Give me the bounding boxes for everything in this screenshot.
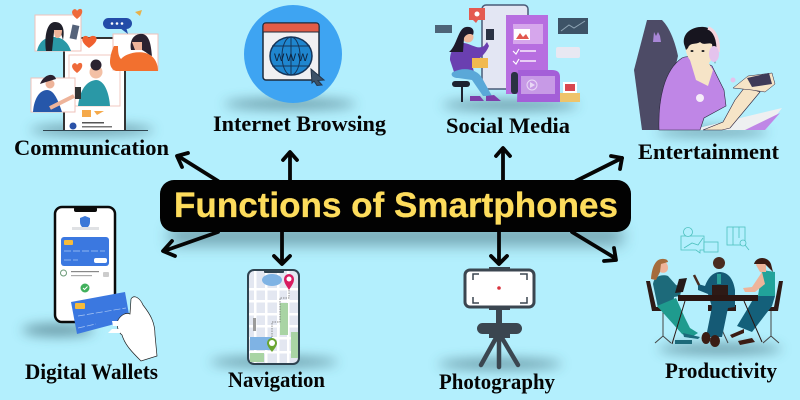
arrow: to digital wallets <box>163 232 218 256</box>
panel: entertainment <box>634 20 782 164</box>
label: photography: Photography <box>439 369 555 394</box>
panel: navigation <box>228 270 325 392</box>
icon: woman lower left <box>31 75 81 112</box>
panel: digital wallets <box>25 207 158 384</box>
arrow: to internet browsing <box>283 152 297 181</box>
icon: phone with bank card <box>55 207 157 361</box>
icon: woman with social screens <box>435 5 588 102</box>
icon: video call phone <box>43 38 148 130</box>
label: social media: Social Media <box>446 113 570 138</box>
panel: internet browsing <box>213 5 386 136</box>
label: digital wallets: Digital Wallets <box>25 359 158 384</box>
arrow: to navigation <box>274 232 290 264</box>
icon: woman top right <box>110 34 158 71</box>
arrow: to communication <box>177 153 218 181</box>
title banner: Functions of Smartphones <box>174 186 618 225</box>
icon: hearts and speech bubble <box>72 9 142 73</box>
icon: woman top left <box>35 15 81 51</box>
icon: phone on tripod <box>465 267 534 367</box>
arrow: to photography <box>491 232 507 264</box>
label: entertainment: Entertainment <box>638 139 780 164</box>
label: communication: Communication <box>14 135 169 160</box>
icon: gamer with headphones <box>634 20 782 130</box>
ground shadows <box>22 99 782 369</box>
panel: photography <box>439 267 555 394</box>
panel: productivity <box>646 227 783 383</box>
arrow: to social media <box>496 148 510 181</box>
label: productivity: Productivity <box>665 358 777 383</box>
panel: social media <box>435 5 588 138</box>
arrow: to productivity <box>572 232 616 261</box>
icon: browser globe: WWW <box>274 52 309 64</box>
icon: meeting around a table <box>646 227 783 347</box>
arrow: to entertainment <box>576 156 622 181</box>
label: internet browsing: Internet Browsing <box>213 111 386 136</box>
title shadow <box>170 228 622 244</box>
panel: communication <box>14 9 169 160</box>
label: navigation: Navigation <box>228 367 325 392</box>
icon: browser globe <box>244 5 342 103</box>
icon: phone with map <box>248 270 299 364</box>
